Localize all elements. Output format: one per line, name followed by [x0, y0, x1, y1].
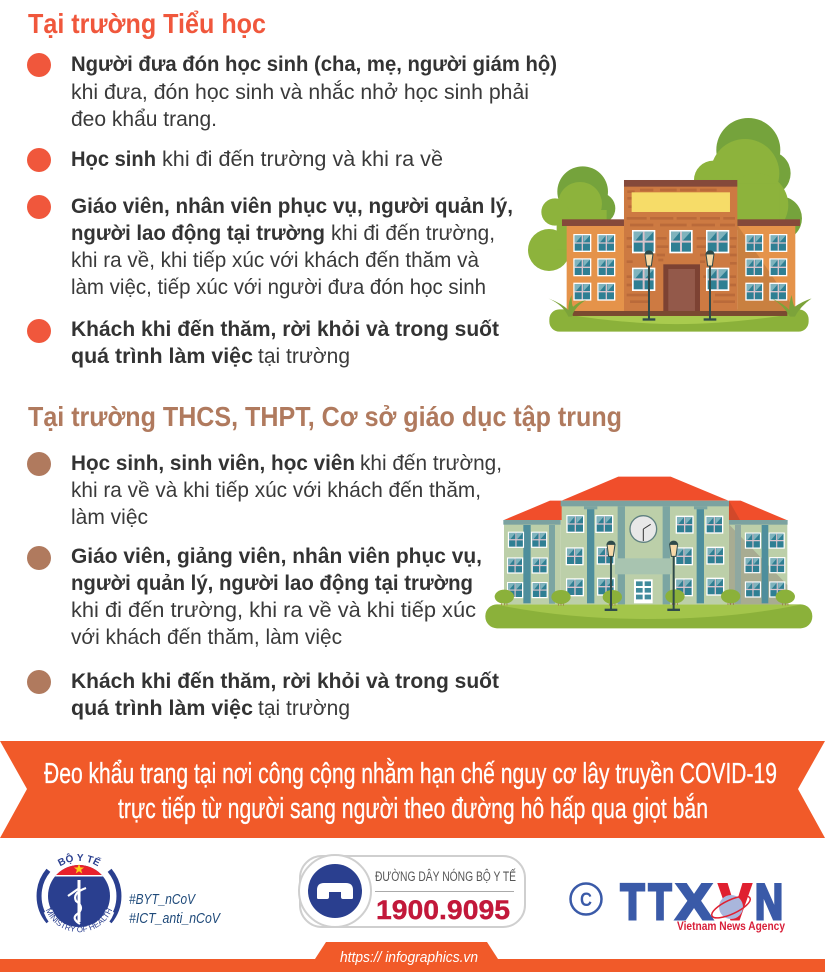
logo: TTXVN news agency: X [676, 874, 712, 930]
bullet item: teachers and staff: với khách đến thăm, làm việc [71, 626, 342, 649]
logo: TTXVN news agency: C [580, 890, 592, 911]
bullet item: teachers and staff: người lao động tại trường [71, 222, 325, 245]
bullet item: students [27, 452, 502, 529]
hashtags [129, 892, 221, 927]
bullet item: teachers and staff: Giáo viên, nhân viên phục vụ, người quản lý, [71, 195, 513, 218]
bullet item: students: làm việc [71, 506, 148, 529]
bullet item: visitors: quá trình làm việc [71, 697, 253, 720]
hashtags: #ICT_anti_nCoV [129, 911, 221, 927]
bullet item: students: khi ra về và khi tiếp xúc với khách đến thăm, [71, 479, 481, 502]
logo: TTXVN news agency: V [719, 874, 752, 930]
logo: TTXVN news agency: N [755, 874, 783, 930]
section: secondary school [27, 401, 622, 720]
bullet item: students: Học sinh, sinh viên, học viên [71, 452, 355, 475]
bullet item: teachers and staff: khi đi đến trường, khi ra về và khi tiếp xúc [71, 599, 476, 622]
bullet item: parents: Người đưa đón học sinh (cha, mẹ, người giám hộ) [71, 53, 557, 76]
bullet item: visitors [27, 318, 499, 368]
footer: website bar [0, 942, 825, 972]
bullet item: students: Học sinh [71, 148, 156, 171]
hashtags: #BYT_nCoV [129, 892, 196, 908]
bullet item: parents: khi đưa, đón học sinh và nhắc nhở học sinh phải [71, 81, 529, 104]
hotline badge [299, 855, 525, 927]
logo: TTXVN news agency [570, 874, 786, 933]
bullet item: teachers and staff: Giáo viên, giảng viên, nhân viên phục vụ, [71, 545, 482, 568]
logo: TTXVN news agency: Vietnam News Agency [677, 921, 786, 933]
illustration: primary school building [528, 118, 812, 332]
heading: primary school: Tại trường Tiểu học [28, 8, 266, 39]
bullet item: visitors: tại trường [258, 697, 350, 720]
logo: ministry of health: BỘ Y TẾ [58, 853, 102, 866]
bullet item: teachers and staff: làm việc, tiếp xúc với người đưa đón học sinh [71, 276, 486, 299]
bullet item: students: khi đi đến trường và khi ra về [162, 148, 443, 171]
logo: TTXVN news agency: T [620, 874, 644, 930]
banner: key message [0, 741, 825, 838]
illustration: secondary school building [485, 477, 812, 628]
icon: telephone handset [317, 883, 353, 899]
bullet item: teachers and staff [27, 545, 482, 649]
bullet item: visitors: tại trường [258, 345, 350, 368]
bullet item: visitors [27, 670, 499, 720]
logo: TTXVN news agency: T [648, 874, 672, 930]
bullet item: teachers and staff: khi đi đến trường, [331, 222, 495, 245]
bullet item: parents: đeo khẩu trang. [71, 108, 217, 131]
hotline badge: ĐƯỜNG DÂY NÓNG BỘ Y TẾ [375, 869, 516, 884]
bullet item: teachers and staff [27, 195, 513, 299]
heading: secondary school: Tại trường THCS, THPT, Cơ sở giáo dục tập trung [28, 401, 622, 432]
logo: ministry of health: MINISTRY OF HEALTH [46, 908, 112, 932]
hotline badge: 1900.9095 [376, 895, 510, 925]
footer: website bar: https:// infographics.vn [340, 949, 478, 966]
bullet item: students: khi đến trường, [360, 452, 502, 475]
bullet item: parents [27, 53, 557, 131]
section: primary school [27, 8, 557, 368]
bullet item: teachers and staff: người quản lý, người lao động tại trường [71, 572, 473, 595]
bullet item: visitors: Khách khi đến thăm, rời khỏi và trong suốt [71, 318, 499, 341]
bullet item: teachers and staff: khi ra về, khi tiếp xúc với khách đến thăm và [71, 249, 479, 272]
logo: ministry of health [36, 853, 122, 932]
bullet item: students [27, 148, 443, 172]
bullet item: visitors: Khách khi đến thăm, rời khỏi và trong suốt [71, 670, 499, 693]
bullet item: visitors: quá trình làm việc [71, 345, 253, 368]
